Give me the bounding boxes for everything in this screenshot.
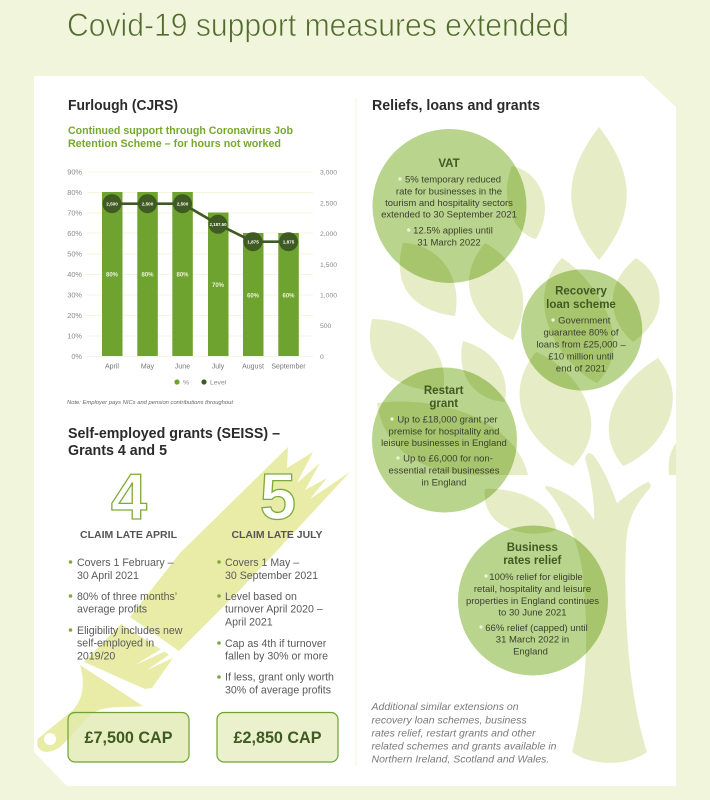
heading: self-employed grants: Self-employed grants (SEISS) – <box>68 426 280 442</box>
level values: 1,875 <box>283 239 295 244</box>
list: grant 4: 30 April 2021 <box>77 570 139 582</box>
circle: business rates relief: 100% relief for eligible <box>489 572 583 583</box>
list: grant 5: Covers 1 May – <box>225 557 299 569</box>
month labels: July <box>212 364 225 370</box>
month labels: September <box>271 364 306 370</box>
left axis: 20% <box>67 311 82 320</box>
level values: 2,187.50 <box>210 222 227 227</box>
icon: paint brush <box>37 447 350 752</box>
list: grant 5: April 2021 <box>225 616 273 628</box>
circle: recovery loan scheme: loans from £25,000 – <box>536 340 626 351</box>
right axis: 1,500 <box>320 262 337 269</box>
closing note: rates relief, restart grants and other <box>372 727 536 739</box>
circle: restart grant: grant <box>429 398 458 410</box>
claim label 5: CLAIM LATE JULY <box>232 529 322 541</box>
circle: business rates relief: 66% relief (capped) until <box>485 623 588 634</box>
level values: 2,500 <box>177 201 189 206</box>
left axis: 50% <box>67 250 82 258</box>
right axis: 0 <box>320 354 324 361</box>
right axis: 2,000 <box>320 231 337 238</box>
heading: self-employed grants: Grants 4 and 5 <box>68 443 167 459</box>
bar values: 60% <box>247 294 260 300</box>
level values: 2,500 <box>142 201 154 206</box>
cap box 7500 <box>68 712 189 762</box>
title: Covid-19 support measures extended <box>67 7 569 43</box>
level markers <box>102 194 298 251</box>
circle: recovery loan scheme: end of 2021 <box>556 364 606 375</box>
right axis: 1,000 <box>320 292 337 300</box>
chart note: Note: Employer pays NICs and pension contributions throughout <box>67 400 233 406</box>
subheading: furlough <box>68 125 293 150</box>
list: grant 4: average profits <box>77 604 147 616</box>
circle: restart grant <box>372 368 517 512</box>
heading: self-employed grants <box>68 426 280 459</box>
level values: 1,875 <box>247 239 259 244</box>
circle: recovery loan scheme: £10 million until <box>548 352 614 363</box>
circle: VAT: 5% temporary reduced <box>405 175 501 186</box>
month labels: May <box>141 364 155 370</box>
circle: restart grant: in England <box>422 478 466 489</box>
circle: VAT <box>372 129 526 283</box>
list: grant 5: Cap as 4th if turnover <box>225 638 327 650</box>
left axis <box>67 168 82 361</box>
right axis: 500 <box>320 323 332 330</box>
numeral 5: 5 <box>260 460 296 533</box>
cap box 7500: £7,500 CAP <box>84 729 172 747</box>
circle: VAT: extended to 30 September 2021 <box>381 210 517 221</box>
numeral 4: 4 <box>111 460 147 533</box>
circle: business rates relief: to 30 June 2021 <box>498 608 567 619</box>
list: grant 4: Eligibility includes new <box>77 625 183 637</box>
list: grant 5: turnover April 2020 – <box>225 604 323 616</box>
list: grant 4: 2019/20 <box>77 650 115 662</box>
circle: restart grant: leisure businesses in England <box>381 438 507 449</box>
circle: business rates relief <box>458 526 608 676</box>
month labels <box>105 364 306 370</box>
month labels: April <box>105 364 119 370</box>
circle: restart grant: Up to £6,000 for non- <box>403 454 493 465</box>
tree leaves <box>370 127 676 534</box>
circle: VAT: rate for businesses in the <box>396 186 502 197</box>
circle: restart grant: essential retail businesses <box>389 466 500 477</box>
circle: restart grant: Up to £18,000 grant per <box>397 415 498 426</box>
closing note: Additional similar extensions on <box>370 701 519 713</box>
circle: business rates relief: rates relief <box>503 555 562 567</box>
list: grant 4: Covers 1 February – <box>77 557 174 569</box>
cap box 2850: £2,850 CAP <box>234 729 322 747</box>
circle: VAT: 12.5% applies until <box>413 226 493 237</box>
list: grant 5: 30% of average profits <box>225 684 331 696</box>
legend: Level <box>210 380 227 386</box>
list: grant 5: Level based on <box>225 591 297 603</box>
circle: recovery loan scheme <box>521 269 642 391</box>
left axis: 80% <box>67 188 82 197</box>
left axis: 70% <box>67 208 82 218</box>
left axis: 60% <box>67 229 82 238</box>
circle: recovery loan scheme: guarantee 80% of <box>543 328 619 339</box>
tree trunk <box>545 453 651 763</box>
list: grant 5: 30 September 2021 <box>225 570 318 582</box>
circle: VAT: VAT <box>438 158 460 170</box>
circle: business rates relief: 31 March 2022 in <box>496 635 569 646</box>
list: grant 4: self-employed in <box>77 638 154 650</box>
closing note: recovery loan schemes, business <box>372 714 527 726</box>
bar values: 60% <box>282 294 295 300</box>
cap box 2850 <box>217 712 338 762</box>
month labels: August <box>242 364 264 370</box>
circle: restart grant: premise for hospitality and <box>389 426 499 437</box>
list: grant 5: fallen by 30% or more <box>225 650 328 662</box>
circle: business rates relief: England <box>513 647 548 658</box>
closing note: Northern Ireland, Scotland and Wales. <box>372 753 549 765</box>
list: grant 4: 80% of three months’ <box>77 591 177 603</box>
circle: recovery loan scheme: Recovery <box>555 286 607 298</box>
bar chart <box>67 168 337 386</box>
bar values: 80% <box>141 272 154 278</box>
closing note: related schemes and grants available in <box>372 740 557 752</box>
circle: business rates relief: properties in England continues <box>466 596 599 607</box>
circle: restart grant: Restart <box>424 385 464 397</box>
circle: business rates relief: Business <box>507 542 558 554</box>
circle: recovery loan scheme: loan scheme <box>546 299 616 311</box>
legend: % <box>183 380 189 386</box>
bar values <box>106 272 295 300</box>
tree illustration <box>370 127 676 763</box>
list: grant 4 <box>69 557 183 662</box>
bars <box>102 192 299 356</box>
circle: VAT: 31 March 2022 <box>417 237 481 248</box>
legend <box>174 379 227 386</box>
list: grant 5 <box>217 557 334 696</box>
right axis <box>320 170 337 361</box>
right axis: 3,000 <box>320 170 337 176</box>
level values <box>106 201 295 244</box>
list: grant 5: If less, grant only worth <box>225 672 334 684</box>
subheading: furlough: Retention Scheme – for hours not worked <box>68 138 281 150</box>
month labels: June <box>175 364 190 370</box>
heading: reliefs: Reliefs, loans and grants <box>372 98 540 114</box>
bar values: 70% <box>212 283 225 289</box>
left axis: 90% <box>67 168 82 176</box>
left axis: 30% <box>67 290 82 300</box>
level values: 2,500 <box>106 201 118 206</box>
heading: furlough: Furlough (CJRS) <box>68 98 178 114</box>
circle: VAT: tourism and hospitality sectors <box>385 198 513 209</box>
circle: business rates relief: retail, hospitality and leisure <box>474 584 591 595</box>
left axis: 40% <box>67 270 82 279</box>
subheading: furlough: Continued support through Coronavirus Job <box>68 125 293 137</box>
claim label 4: CLAIM LATE APRIL <box>80 529 178 541</box>
level line <box>112 204 288 242</box>
bar values: 80% <box>176 272 189 278</box>
circle: recovery loan scheme: Government <box>558 316 611 327</box>
bar values: 80% <box>106 272 119 278</box>
left axis: 10% <box>67 332 82 340</box>
right axis: 2,500 <box>320 200 337 208</box>
closing note <box>370 701 557 765</box>
left axis: 0% <box>71 352 82 361</box>
